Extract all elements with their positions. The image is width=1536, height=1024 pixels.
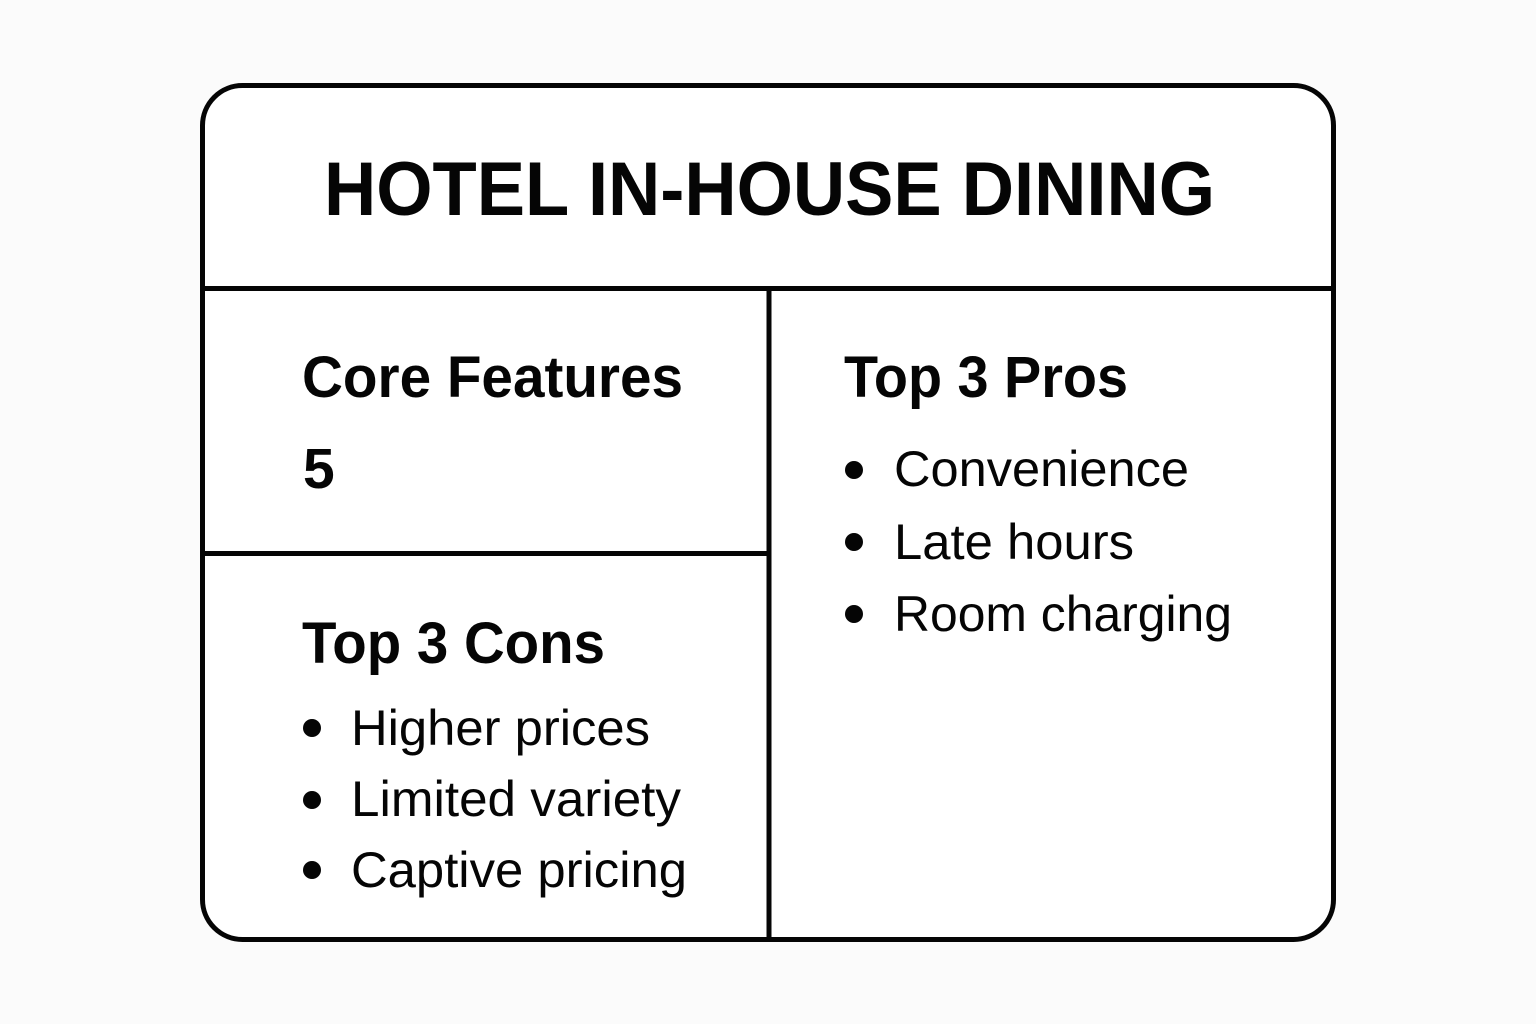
heading: core features: Core Features	[302, 345, 683, 410]
list: cons: Limited variety	[351, 771, 681, 827]
list: pros: Room charging	[894, 586, 1232, 642]
list: pros: Late hours	[894, 514, 1134, 570]
list: pros: Convenience	[894, 441, 1189, 497]
heading: top 3 pros: Top 3 Pros	[844, 345, 1128, 410]
list: cons: Captive pricing	[351, 842, 687, 898]
card frame	[202, 86, 1334, 940]
title: HOTEL IN-HOUSE DINING	[324, 147, 1215, 232]
heading: top 3 cons: Top 3 Cons	[302, 611, 605, 676]
panel: top 3 pros	[844, 345, 1232, 642]
value: 5: 5	[303, 437, 335, 501]
list: pros	[845, 441, 1232, 642]
list: cons	[303, 700, 687, 898]
panel: top 3 cons	[302, 611, 687, 898]
panel: core features	[302, 345, 683, 501]
list: cons: Higher prices	[351, 700, 650, 756]
